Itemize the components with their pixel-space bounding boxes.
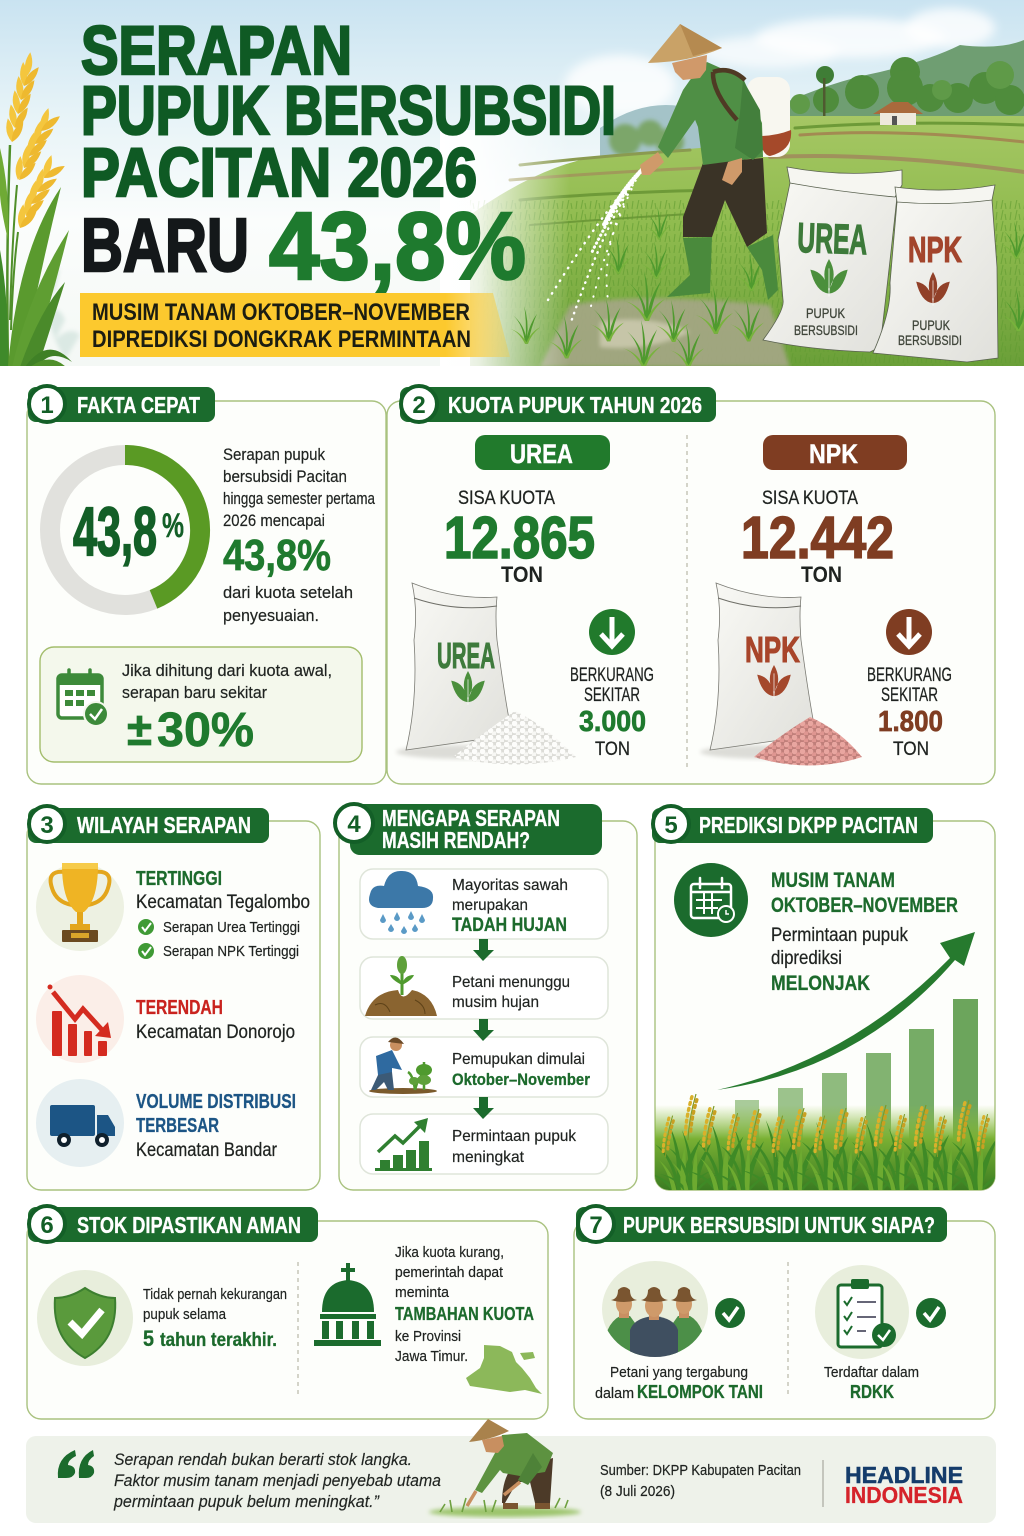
donut chart 43,8% xyxy=(50,455,200,605)
icon: trophy xyxy=(51,863,109,942)
icon: farmer with sprayer xyxy=(640,24,791,300)
step: pemupukan dimulai xyxy=(360,1037,608,1097)
text: serapan description: 2026 mencapai xyxy=(223,511,325,530)
seedlings xyxy=(510,207,1024,367)
text: kelompok tani: Petani yang tergabung xyxy=(610,1364,748,1381)
text: serapan description: Serapan pupuk xyxy=(223,445,325,464)
panel 5: prediksi DKPP xyxy=(645,806,1009,1195)
icon: falling chart xyxy=(48,984,111,1056)
logo: Headline Indonesia: INDONESIA xyxy=(845,1482,963,1508)
item: volume distribusi: TERBESAR xyxy=(136,1115,219,1137)
quote: Serapan rendah bukan berarti stok langka. xyxy=(114,1450,412,1469)
subtitle banner: DIPREDIKSI DONGKRAK PERMINTAAN xyxy=(92,326,471,353)
text: tidak pernah kurang: tahun terakhir. xyxy=(160,1330,277,1351)
heading 5: PREDIKSI DKPP PACITAN xyxy=(699,812,918,838)
heading 7: 7 xyxy=(589,1212,603,1239)
icon: three farmers xyxy=(602,1261,708,1358)
heading 4 xyxy=(335,804,602,855)
icon: NPK sack xyxy=(873,185,998,362)
item: terendah xyxy=(36,975,295,1063)
icon: NPK sack: BERSUBSIDI xyxy=(898,332,962,348)
icon: farmer planting xyxy=(369,1037,437,1094)
icon: UREA sack: PUPUK xyxy=(806,305,846,321)
icon: shield xyxy=(37,1270,133,1366)
step: pemupukan dimulai: Oktober–November xyxy=(452,1070,590,1089)
icon: down arrow xyxy=(589,609,635,655)
water xyxy=(540,298,790,367)
item: tertinggi: Serapan NPK Tertinggi xyxy=(163,943,299,960)
icon: npk sack and granules: NPK xyxy=(745,629,800,670)
urea column: SEKITAR xyxy=(584,685,640,706)
npk column: TON xyxy=(801,562,842,587)
text: tidak pernah kurang xyxy=(143,1286,287,1351)
item: volume distribusi: VOLUME DISTRIBUSI xyxy=(136,1091,296,1113)
logo: Headline Indonesia: HEADLINE xyxy=(845,1462,963,1488)
quote: permintaan pupuk belum meningkat.” xyxy=(113,1492,380,1511)
heading 6: 6 xyxy=(40,1212,54,1239)
step: tadah hujan: merupakan xyxy=(452,897,528,914)
text: RDKK xyxy=(824,1364,919,1402)
text: tidak pernah kurang: Tidak pernah kekurangan xyxy=(143,1286,287,1303)
text: serapan description: bersubsidi Pacitan xyxy=(223,467,347,486)
icon: calendar clock xyxy=(674,863,748,937)
panel 1: fakta cepat xyxy=(27,386,386,784)
quote: Faktor musim tanam menjadi penyebab utama xyxy=(114,1471,441,1490)
item: terendah: Kecamatan Donorojo xyxy=(136,1022,295,1043)
item: terendah: TERENDAH xyxy=(136,997,223,1019)
heading 5: 5 xyxy=(664,812,678,839)
item: tertinggi: Kecamatan Tegalombo xyxy=(136,892,310,913)
icon: calendar xyxy=(58,670,108,726)
item: volume distribusi: Kecamatan Bandar xyxy=(136,1140,278,1161)
title: 43,8% xyxy=(269,193,526,300)
step: petani menunggu: musim hujan xyxy=(452,994,539,1011)
quote xyxy=(113,1450,441,1511)
heading 1: FAKTA CEPAT xyxy=(77,392,200,418)
step: tadah hujan xyxy=(360,869,608,939)
npk column: 1.800 xyxy=(878,706,943,738)
heading 1: 1 xyxy=(40,392,54,419)
step: tadah hujan: TADAH HUJAN xyxy=(452,915,567,936)
icon: rice plant left xyxy=(0,52,80,367)
trees xyxy=(790,57,1024,115)
item: volume distribusi xyxy=(36,1079,296,1167)
text: tidak pernah kurang: pupuk selama xyxy=(143,1306,227,1323)
heading 4: MENGAPA SERAPAN xyxy=(382,805,560,831)
text: tambahan kuota: ke Provinsi xyxy=(395,1328,461,1345)
npk column: SEKITAR xyxy=(881,685,938,706)
callout: kuota awal 30%: 30% xyxy=(157,704,254,757)
text: tambahan kuota: Jika kuota kurang, xyxy=(395,1244,504,1261)
text: kelompok tani xyxy=(595,1364,763,1402)
urea column: TON xyxy=(501,562,543,587)
source: Sumber: DKPP Kabupaten Pacitan xyxy=(600,1463,801,1479)
npk column xyxy=(700,435,952,766)
callout: kuota awal 30%: serapan baru sekitar xyxy=(122,683,267,702)
callout: kuota awal 30% xyxy=(40,647,362,762)
subtitle banner xyxy=(80,293,510,357)
terraces xyxy=(510,123,1024,225)
heading 3: WILAYAH SERAPAN xyxy=(77,812,251,838)
urea column: TON xyxy=(595,739,630,760)
callout: kuota awal 30%: Jika dihitung dari kuota awal, xyxy=(122,661,332,680)
panel 6: stok aman xyxy=(27,1206,548,1419)
text: serapan description xyxy=(223,445,375,625)
text: prediksi: OKTOBER–NOVEMBER xyxy=(771,894,958,917)
title: SERAPAN xyxy=(81,12,352,89)
icon: check xyxy=(138,943,154,959)
text: kelompok tani: dalam xyxy=(595,1385,634,1402)
text: serapan description: dari kuota setelah xyxy=(223,583,353,602)
heading 3 xyxy=(28,806,269,843)
text: prediksi: MELONJAK xyxy=(771,972,870,995)
icon: check xyxy=(916,1298,946,1328)
heading 6: STOK DIPASTIKAN AMAN xyxy=(77,1212,301,1238)
icon: farm house xyxy=(873,102,923,125)
step: permintaan meningkat xyxy=(360,1114,608,1174)
arrow: rising xyxy=(717,932,975,1090)
urea column: SISA KUOTA xyxy=(458,488,555,509)
icon: farmer planting rice xyxy=(429,1419,581,1517)
npk column: BERKURANG xyxy=(867,665,952,686)
title: PACITAN 2026 xyxy=(81,134,477,211)
icon: check xyxy=(138,919,154,935)
icon: rain cloud xyxy=(369,871,433,934)
urea column: BERKURANG xyxy=(570,665,654,686)
heading 2: KUOTA PUPUK TAHUN 2026 xyxy=(448,392,702,418)
urea column xyxy=(396,435,654,764)
panel 7: untuk siapa xyxy=(574,1206,995,1419)
icon: urea sack and granules xyxy=(396,583,576,764)
icon: UREA sack xyxy=(763,167,902,352)
panel 4: mengapa serapan rendah xyxy=(335,804,637,1190)
icon: clipboard xyxy=(815,1265,909,1359)
icon: map of Jawa Timur xyxy=(466,1345,542,1394)
title: BARU xyxy=(81,203,249,287)
text: serapan description: penyesuaian. xyxy=(223,606,319,625)
icon: down arrow xyxy=(886,609,932,655)
text: tambahan kuota xyxy=(395,1244,534,1365)
npk column: 12.442 xyxy=(741,505,894,571)
source: (8 Juli 2026) xyxy=(600,1484,675,1500)
heading 4: 4 xyxy=(347,811,361,838)
panel 3: wilayah serapan xyxy=(27,806,320,1190)
step: petani menunggu: Petani menunggu xyxy=(452,974,570,991)
title: PUPUK BERSUBSIDI xyxy=(81,72,616,149)
npk column: SISA KUOTA xyxy=(762,488,858,509)
step: permintaan meningkat: meningkat xyxy=(452,1149,525,1166)
icon: check xyxy=(715,1298,745,1328)
step: permintaan meningkat: Permintaan pupuk xyxy=(452,1128,577,1145)
urea column: 3.000 xyxy=(579,706,646,738)
heading 4: MASIH RENDAH? xyxy=(382,827,530,853)
heading 3: 3 xyxy=(40,812,54,839)
title xyxy=(81,12,616,300)
text: prediksi: diprediksi xyxy=(771,948,842,969)
icon: NPK sack: NPK xyxy=(908,229,962,270)
text: prediksi: MUSIM TANAM xyxy=(771,869,895,892)
donut chart 43,8%: 43,8 xyxy=(73,493,157,570)
icon: government building xyxy=(314,1263,381,1346)
icon: fertilizer spray xyxy=(548,170,642,325)
heading 2 xyxy=(400,386,716,422)
step: pemupukan dimulai: Pemupukan dimulai xyxy=(452,1051,585,1068)
heading 2: 2 xyxy=(412,392,426,419)
text: serapan description: 43,8% xyxy=(223,531,331,580)
text: prediksi: Permintaan pupuk xyxy=(771,925,908,946)
logo: Headline Indonesia xyxy=(845,1462,963,1508)
hero banner xyxy=(0,0,1024,367)
text: tidak pernah kurang: 5 xyxy=(143,1326,154,1351)
text: tambahan kuota: meminta xyxy=(395,1284,450,1301)
rice field xyxy=(655,1094,995,1190)
npk column: NPK xyxy=(809,439,858,469)
text: RDKK: RDKK xyxy=(850,1382,894,1402)
item: tertinggi: TERTINGGI xyxy=(136,868,222,890)
icon: soil and sprout xyxy=(365,956,437,1016)
icon: npk sack and granules xyxy=(700,583,862,766)
icon: urea sack and granules: UREA xyxy=(437,635,495,676)
text: tambahan kuota: TAMBAHAN KUOTA xyxy=(395,1304,534,1324)
step: tadah hujan: Mayoritas sawah xyxy=(452,877,568,894)
subtitle banner: MUSIM TANAM OKTOBER–NOVEMBER xyxy=(92,299,470,326)
icon: NPK sack: PUPUK xyxy=(912,317,951,333)
text: kelompok tani: KELOMPOK TANI xyxy=(637,1382,763,1402)
bar chart xyxy=(735,999,978,1175)
panel 2: kuota pupuk xyxy=(387,386,995,784)
source xyxy=(600,1463,801,1500)
icon: growth chart xyxy=(375,1118,432,1171)
icon: truck xyxy=(50,1105,115,1147)
text: RDKK: Terdaftar dalam xyxy=(824,1364,919,1381)
urea column: 12.865 xyxy=(444,505,595,571)
heading 1 xyxy=(28,386,215,422)
icon: quotation mark xyxy=(58,1450,94,1478)
heading 7 xyxy=(576,1206,947,1242)
heading 5 xyxy=(652,806,933,843)
urea column: UREA xyxy=(510,439,573,469)
heading 7: PUPUK BERSUBSIDI UNTUK SIAPA? xyxy=(623,1212,935,1238)
item: tertinggi: Serapan Urea Tertinggi xyxy=(163,919,300,936)
heading 6 xyxy=(28,1206,318,1242)
text: tambahan kuota: Jawa Timur. xyxy=(395,1348,468,1365)
text: prediksi xyxy=(771,869,958,995)
npk column: TON xyxy=(893,739,929,760)
icon: UREA sack: UREA xyxy=(797,214,868,263)
callout: kuota awal 30%: ± xyxy=(127,703,152,755)
step: petani menunggu xyxy=(360,956,608,1019)
item: tertinggi xyxy=(36,863,310,960)
footer bar xyxy=(26,1419,996,1523)
text: tambahan kuota: pemerintah dapat xyxy=(395,1264,504,1281)
arrows between steps xyxy=(473,939,494,1119)
icon: UREA sack: BERSUBSIDI xyxy=(794,322,858,338)
text: serapan description: hingga semester pertama xyxy=(223,489,375,508)
donut chart 43,8%: % xyxy=(162,507,184,545)
